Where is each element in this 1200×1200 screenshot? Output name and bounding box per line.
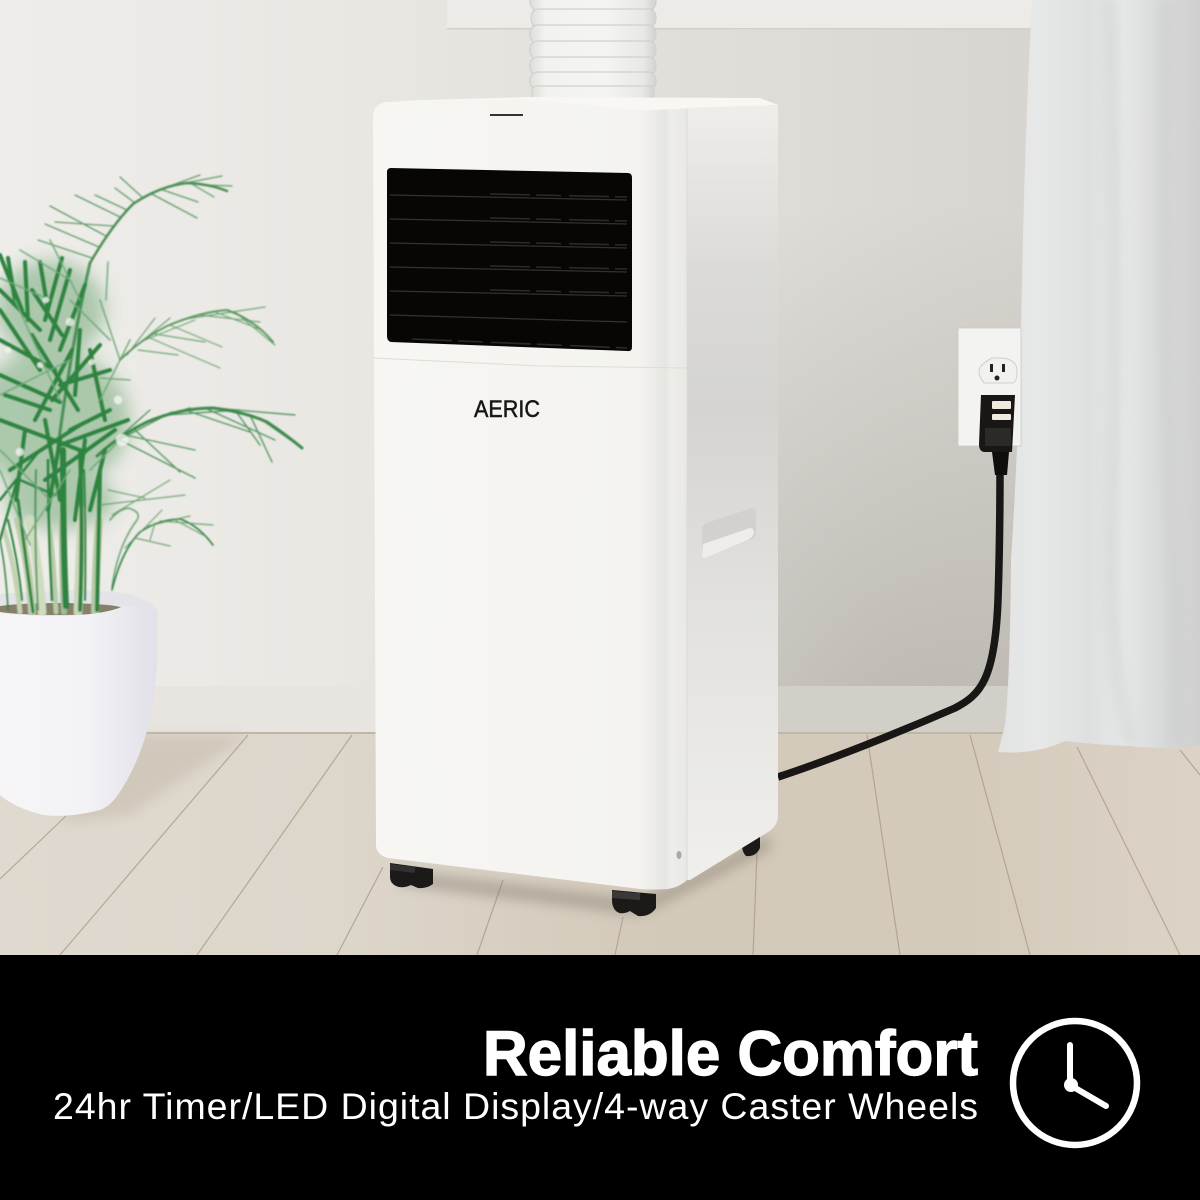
dark stalks [0,263,213,612]
heading: Reliable Comfort [483,1019,978,1089]
portable air conditioner [373,97,778,916]
ground shadow [400,835,770,915]
louvre vent [387,168,632,351]
top seam [490,114,523,116]
icon: clock [1013,1021,1137,1145]
unit top surface [391,97,778,111]
baseboard [0,686,1200,734]
panel seam [374,358,687,368]
wall outlet [958,328,1021,446]
pale stalk bases [4,510,99,612]
carry handle recess [702,508,756,558]
socket [979,358,1017,383]
plug [979,395,1015,475]
frond: second [120,307,275,368]
caption band [0,955,1200,1200]
pot back rim [0,591,157,618]
frond: third [97,408,302,478]
potted palm plant [0,175,302,816]
dense foliage mass [0,260,130,530]
exhaust duct hose [530,0,656,100]
room background [0,0,1200,955]
curtain [998,0,1200,753]
soil [0,603,124,615]
frond: lower [100,480,213,548]
white gaps among leaves [5,297,128,456]
power cord [778,470,1000,777]
white pot [0,606,158,816]
frond: left cluster leaves [0,255,128,540]
unit front body [373,100,687,890]
outlet plate [958,328,1021,446]
wall [0,0,1200,736]
subheading: 24hr Timer/LED Digital Display/4-way Caster Wheels [53,1085,978,1127]
AERIC logo: AERIC [474,396,540,423]
drain plug [676,851,682,859]
caster wheels [390,836,760,916]
pot floor shadow [60,735,248,825]
frond: top [38,175,232,263]
palm foliage [0,175,302,612]
power cord and plug [778,395,1015,777]
unit side panel [675,105,778,880]
wood floor [0,734,1200,955]
window sill [447,0,1037,30]
